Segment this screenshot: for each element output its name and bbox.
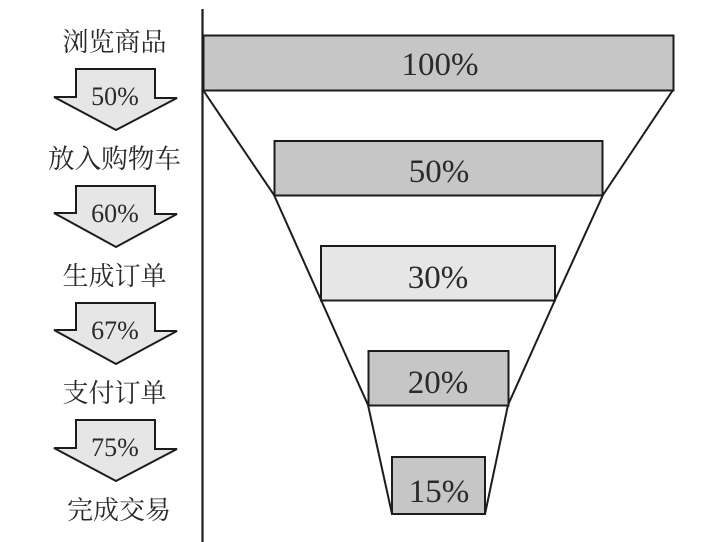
arrow: 67%: 67% [91,316,139,345]
label: 完成交易: 完成交易 [67,496,171,525]
funnel right side line [485,90,673,514]
bar: 50%: 50% [409,154,469,190]
bar: 15%: 15% [409,474,469,510]
arrow: 50% [54,69,177,130]
bar: 30%: 30% [408,260,468,296]
bar: 100%: 100% [402,47,478,83]
funnel left side line [203,90,392,514]
bar: 100% [204,36,674,90]
label: 支付订单: 支付订单 [62,379,167,408]
funnel chart [203,36,674,514]
vertical axis line [201,9,204,542]
bar: 15% [392,457,485,514]
bar: 30% [321,246,555,300]
bar: 50% [274,141,602,196]
arrow: 60% [54,186,177,247]
label: 浏览商品: 浏览商品 [62,28,167,57]
arrow: 75% [54,420,177,481]
arrow: 75%: 75% [91,433,139,462]
bar: 20% [368,351,508,406]
arrow: 60%: 60% [91,199,139,228]
bar: 20%: 20% [408,365,468,401]
label: 生成订单: 生成订单 [62,262,167,291]
arrow: 67% [54,303,177,364]
arrow: 50%: 50% [91,82,139,111]
label: 放入购物车: 放入购物车 [48,144,181,174]
